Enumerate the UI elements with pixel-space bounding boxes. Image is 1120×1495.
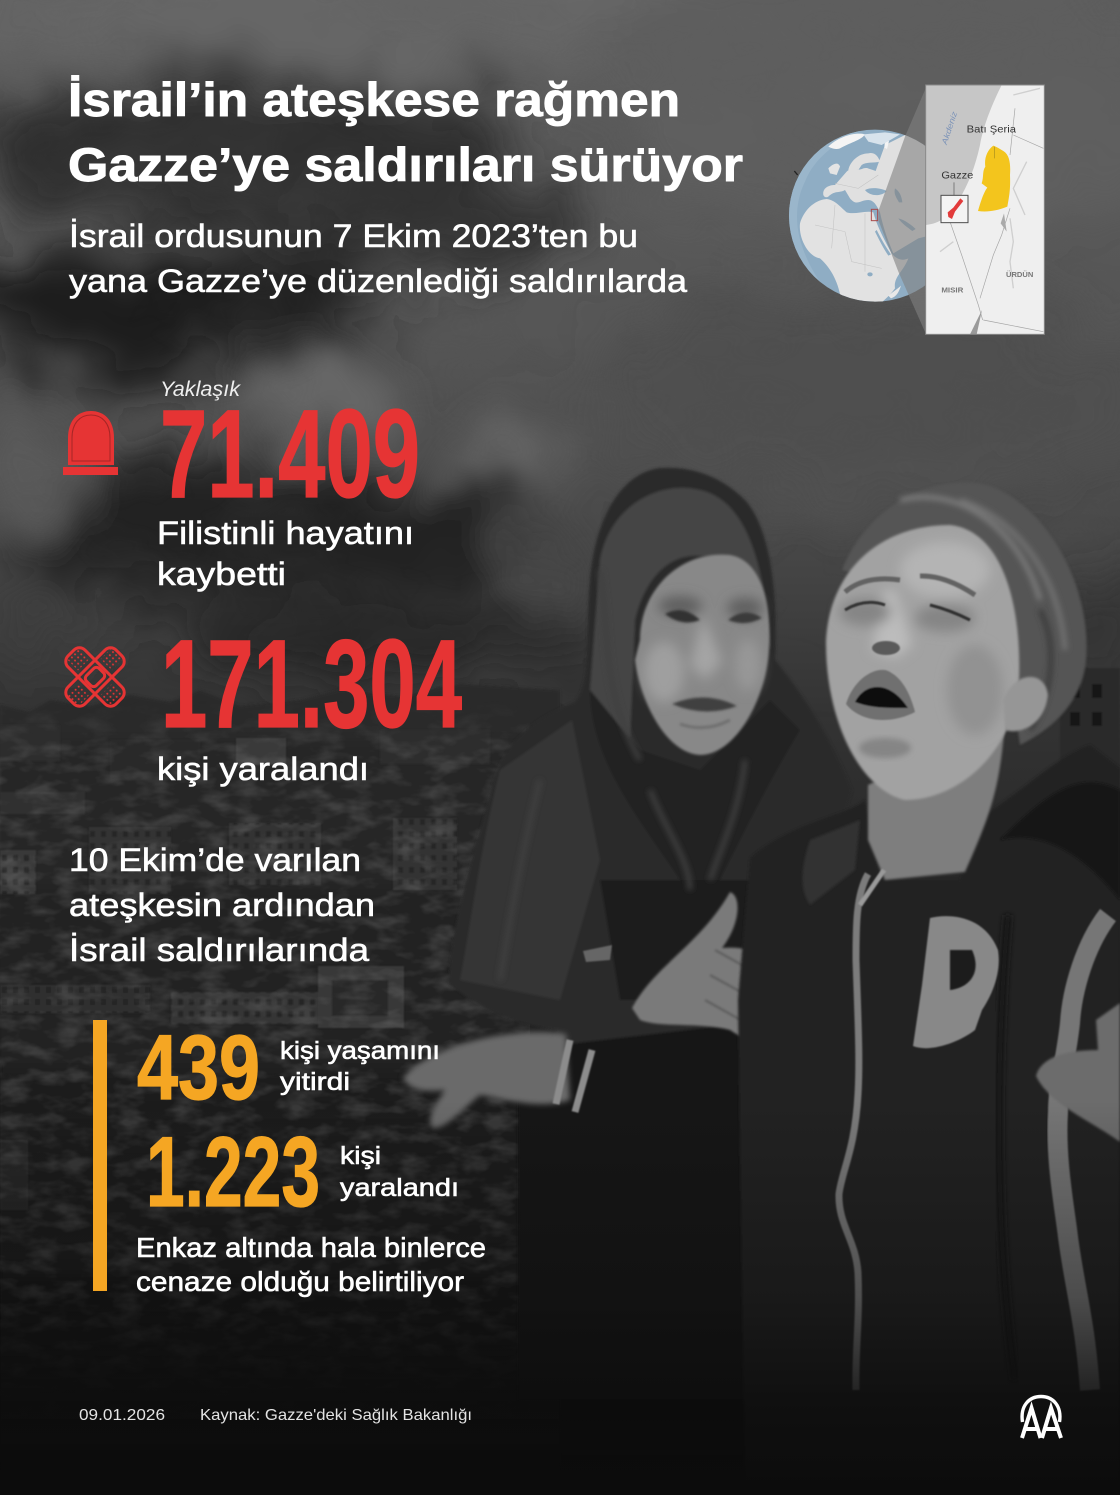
map labels: Batı Şeria	[967, 124, 1016, 135]
hand on the girl's arm	[1036, 1003, 1120, 1142]
ear	[1003, 677, 1048, 731]
stat block: deaths: Yaklaşık	[160, 378, 242, 401]
note: bodies under rubble: cenaze olduğu belirtiliyor	[136, 1266, 464, 1297]
stat block: deaths: kaybetti	[157, 556, 286, 592]
title	[68, 73, 743, 191]
accent bar	[93, 1020, 107, 1291]
hand on chest	[632, 892, 783, 1040]
sequined strap	[1057, 915, 1108, 1390]
heading: after the ceasefire: 10 Ekim’de varılan	[69, 842, 361, 878]
globe	[789, 130, 926, 302]
West Bank area	[978, 146, 1010, 211]
city skyline	[0, 684, 560, 1495]
ceasefire stats: 439	[137, 1017, 260, 1119]
note: bodies under rubble	[136, 1232, 486, 1297]
subtitle: yana Gazze’ye düzenlediği saldırılarda	[69, 263, 687, 299]
title: Gazze’ye saldırıları sürüyor	[68, 138, 743, 191]
icon: gravestone	[63, 411, 118, 475]
stat block: deaths: Filistinli hayatını	[157, 515, 414, 551]
heading: after the ceasefire: İsrail saldırılarında	[69, 932, 369, 968]
brooch	[765, 945, 808, 975]
stat block: injured: kişi yaralandı	[157, 751, 369, 787]
zoom connector	[879, 88, 926, 333]
heading: after the ceasefire: ateşkesin ardından	[69, 887, 375, 923]
letter P patch	[913, 916, 999, 1048]
note: bodies under rubble: Enkaz altında hala binlerce	[136, 1232, 486, 1263]
ceasefire stats: yitirdi	[280, 1068, 350, 1096]
face of girl	[826, 525, 1019, 800]
ceasefire stats: 1.223	[146, 1116, 320, 1227]
map labels: Akdeniz	[940, 110, 959, 147]
ceasefire stats	[137, 1017, 459, 1227]
footer: date and source: 09.01.2026	[79, 1407, 165, 1424]
Gaza area	[948, 198, 963, 219]
hair	[842, 482, 1087, 745]
face of older woman	[635, 555, 769, 755]
title: İsrail’in ateşkese rağmen	[68, 73, 680, 126]
building at right edge	[1060, 668, 1120, 778]
inset map	[926, 85, 1044, 334]
ceasefire stats: kişi yaşamını	[280, 1037, 440, 1065]
hoodie zipper	[839, 874, 868, 1390]
subtitle	[69, 218, 687, 299]
Gaza frame	[941, 195, 968, 223]
icon: crossed bandages	[62, 644, 128, 710]
hoodie	[738, 745, 1120, 1495]
subtitle: İsrail ordusunun 7 Ekim 2023’ten bu	[69, 218, 638, 254]
bottom dark fade	[0, 1100, 1120, 1495]
map labels	[940, 110, 1033, 294]
stat block: injured: 171.304	[161, 615, 462, 754]
stat block: deaths: 71.409	[160, 385, 420, 524]
stat block: deaths	[63, 378, 420, 592]
footer: date and source: Kaynak: Gazze'deki Sağlık Bakanlığı	[200, 1407, 472, 1424]
outstretched hand	[403, 1032, 570, 1128]
ceasefire stats: yaralandı	[340, 1174, 459, 1202]
stat block: injured	[62, 615, 462, 787]
photo: grieving older woman in headscarf	[403, 468, 852, 1400]
footer: date and source	[79, 1407, 472, 1424]
photo: crying girl in dark hoodie	[738, 482, 1120, 1495]
locator map	[879, 85, 1044, 334]
map labels: ÜRDÜN	[1006, 270, 1033, 279]
map labels: Gazze	[941, 170, 974, 181]
map labels: MISIR	[941, 287, 963, 294]
heading: after the ceasefire	[69, 842, 375, 968]
logo: AA	[1022, 1396, 1061, 1438]
neck	[868, 720, 1005, 880]
ceasefire stats: kişi	[340, 1142, 381, 1170]
